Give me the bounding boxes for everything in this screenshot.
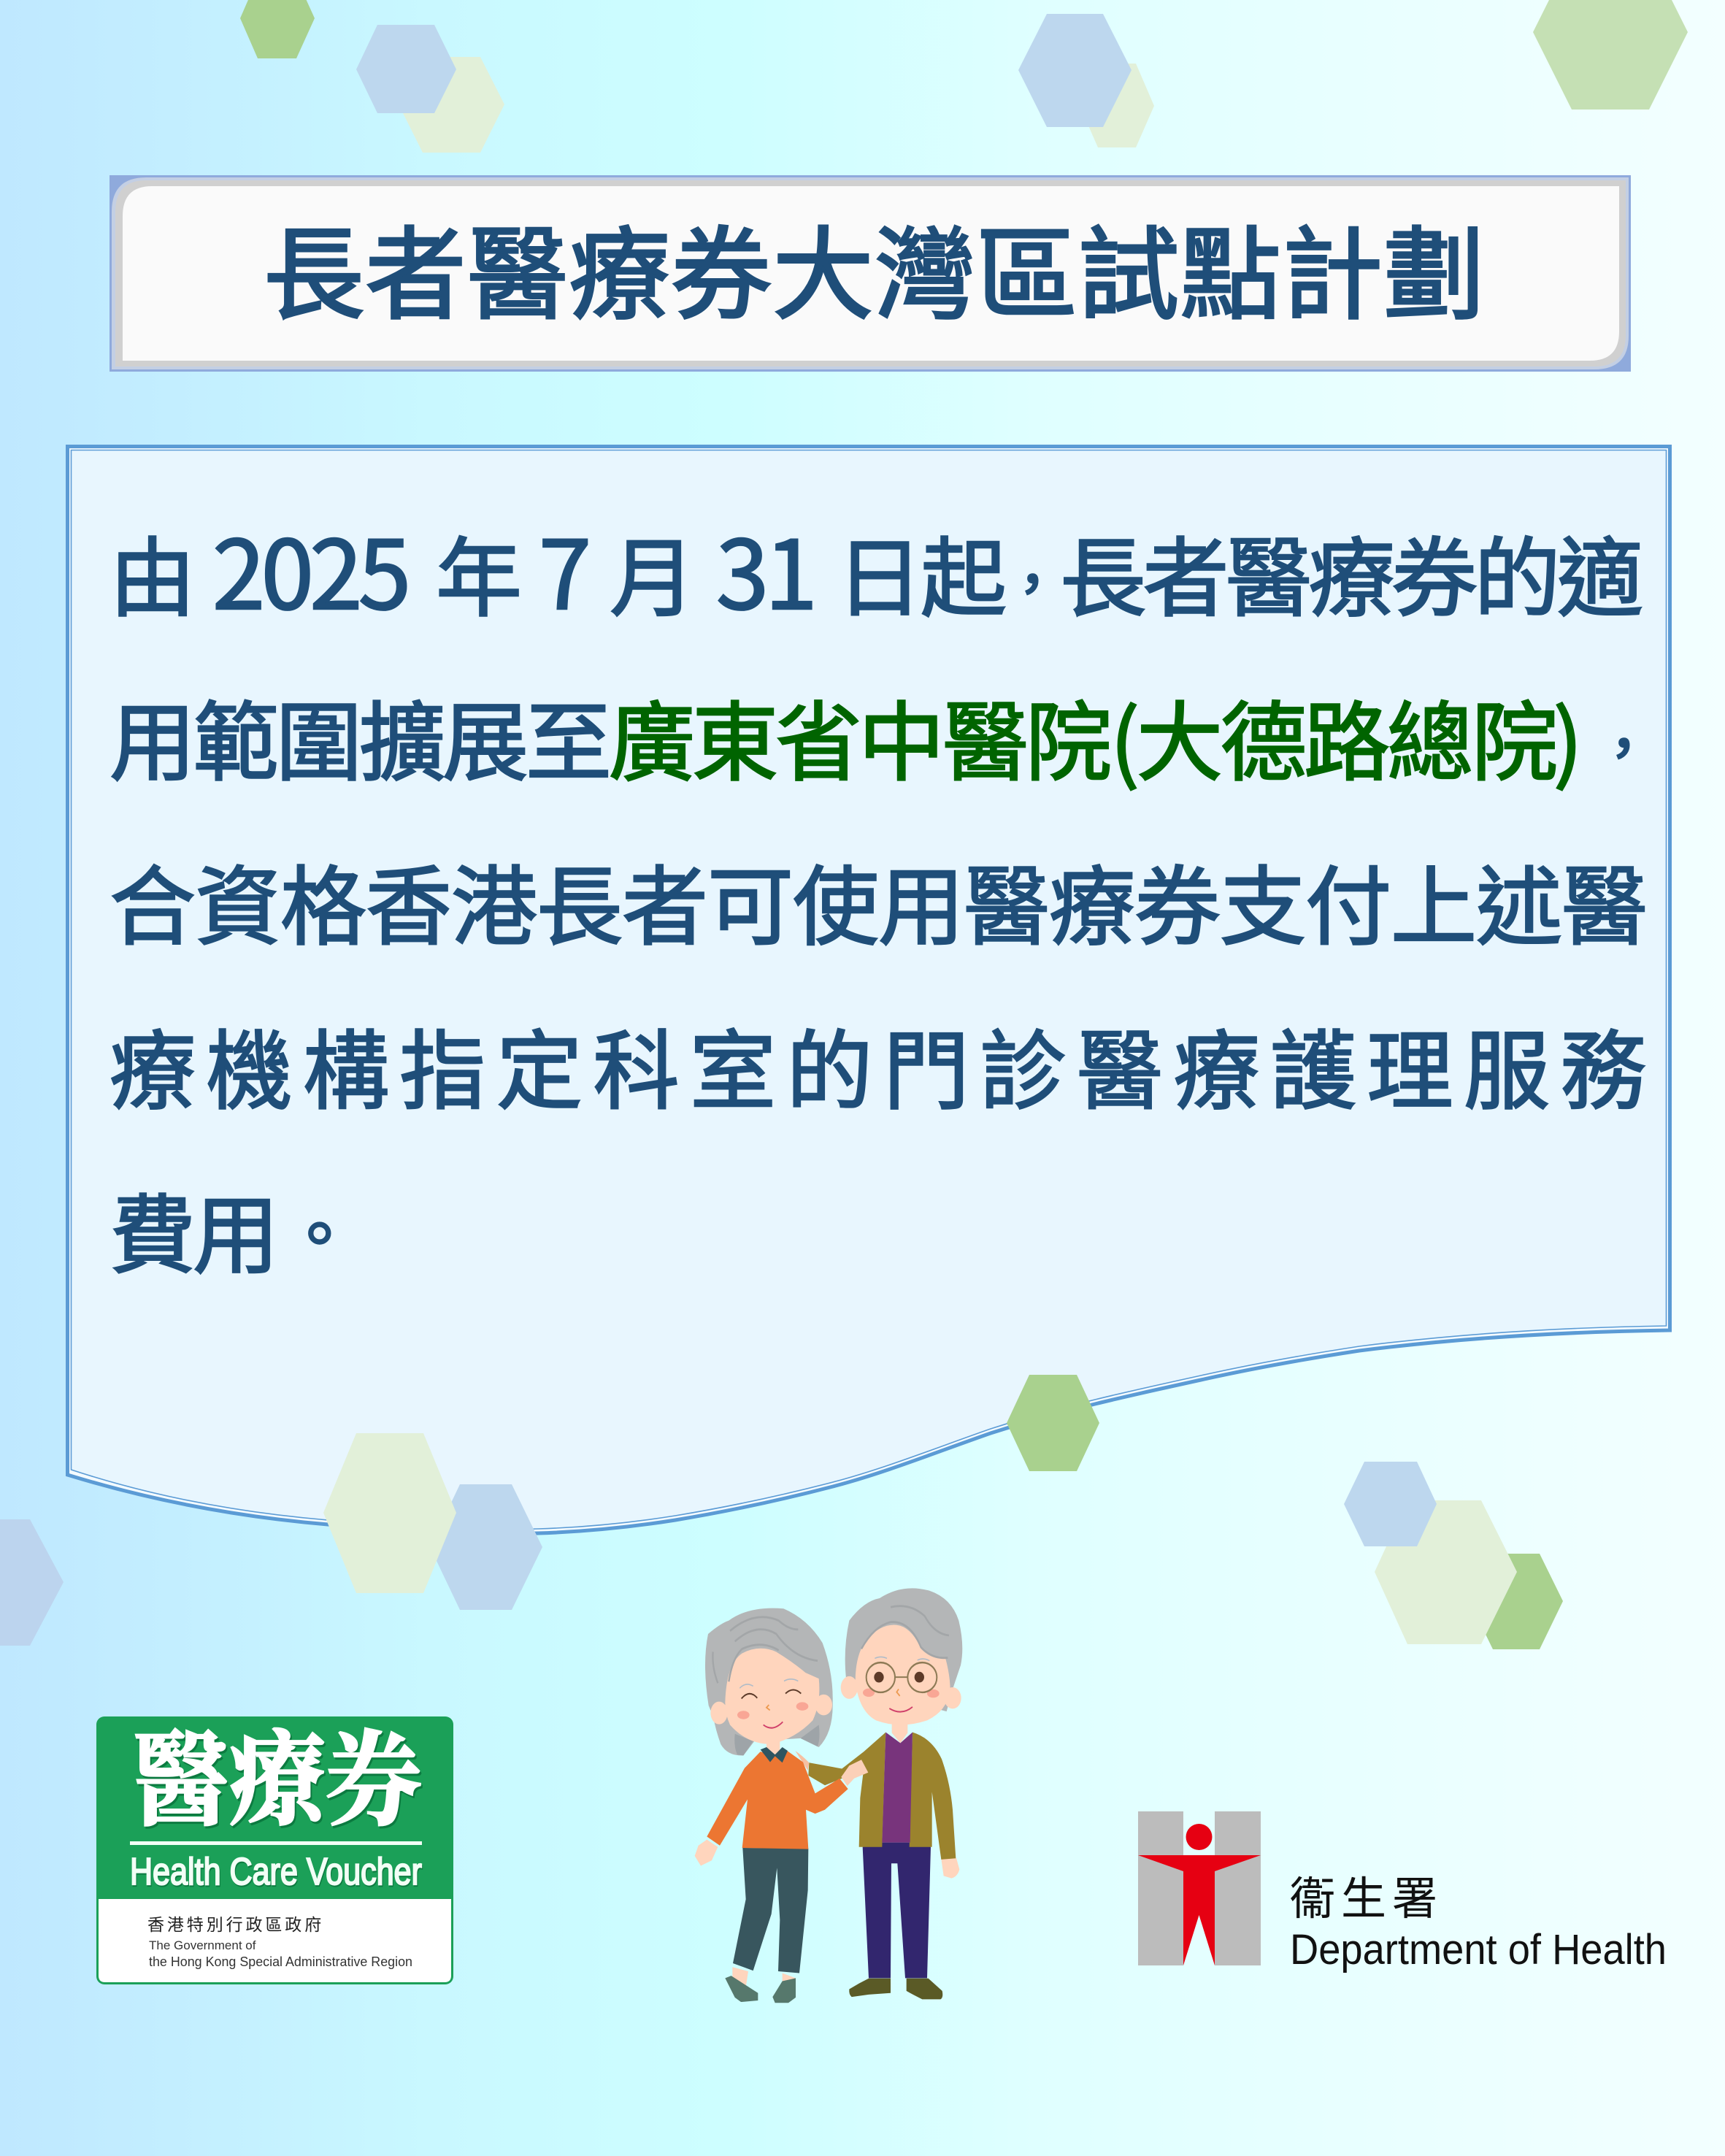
logo: health care voucher bbox=[96, 1699, 453, 1984]
body text line 3: 合資格香港長者可使用醫療券支付上述醫 bbox=[110, 837, 1647, 962]
body text line 4: 療機構指定科室的門診醫療護理服務 bbox=[110, 1002, 1657, 1127]
department chinese name: 衞生署 bbox=[1290, 1862, 1443, 1927]
title text: 長者醫療券大灣區試點計劃 bbox=[264, 193, 1486, 339]
body text line 5: 費用 bbox=[110, 1166, 279, 1291]
body text line 1: ， bbox=[1003, 538, 1061, 623]
body text line 1: 年 bbox=[436, 509, 522, 634]
body text line 2 with highlighted hospital name: 大德路總院 bbox=[1137, 673, 1558, 798]
body text line 1: 長者醫療券的適 bbox=[1060, 509, 1643, 634]
body text line 1: 7 bbox=[539, 499, 588, 637]
body text line 1: 由 bbox=[110, 509, 196, 634]
body text line 5: 。 bbox=[285, 1180, 354, 1280]
body text line 1: 31 bbox=[716, 499, 813, 637]
body text line 1: 月 bbox=[610, 509, 696, 634]
woman bbox=[695, 1608, 868, 2003]
logo: health care voucher: the Hong Kong Special Administrative Region bbox=[149, 1954, 412, 1969]
body text line 1: 日起 bbox=[837, 509, 1007, 634]
logo: department of health bbox=[1138, 1811, 1667, 1973]
logo: health care voucher: The Government of bbox=[149, 1938, 256, 1952]
panel: announcement body bbox=[67, 447, 1670, 1534]
illustration: elderly couple bbox=[695, 1588, 962, 2003]
logo chinese name: 醫療券 bbox=[133, 1699, 422, 1846]
body text line 2 with highlighted hospital name: ) bbox=[1553, 673, 1583, 798]
hexagon decorations: lower bbox=[0, 1375, 1563, 1649]
logo government credit: 香港特別行政區政府 bbox=[147, 1911, 324, 1936]
body text line 2 with highlighted hospital name: ( bbox=[1110, 673, 1140, 798]
logo english name: Health Care Voucher bbox=[130, 1851, 422, 1893]
body text line 2 with highlighted hospital name: 廣東省中醫院 bbox=[609, 673, 1112, 798]
body text line 2 with highlighted hospital name: 用範圍擴展至 bbox=[110, 673, 612, 798]
hexagon decorations: top bbox=[240, 0, 1688, 153]
man bbox=[808, 1588, 962, 1999]
title banner bbox=[110, 175, 1631, 372]
body text line 2 with highlighted hospital name: ， bbox=[1594, 702, 1653, 787]
body text line 1: 2025 bbox=[212, 499, 407, 637]
department english name: Department of Health bbox=[1290, 1926, 1667, 1973]
